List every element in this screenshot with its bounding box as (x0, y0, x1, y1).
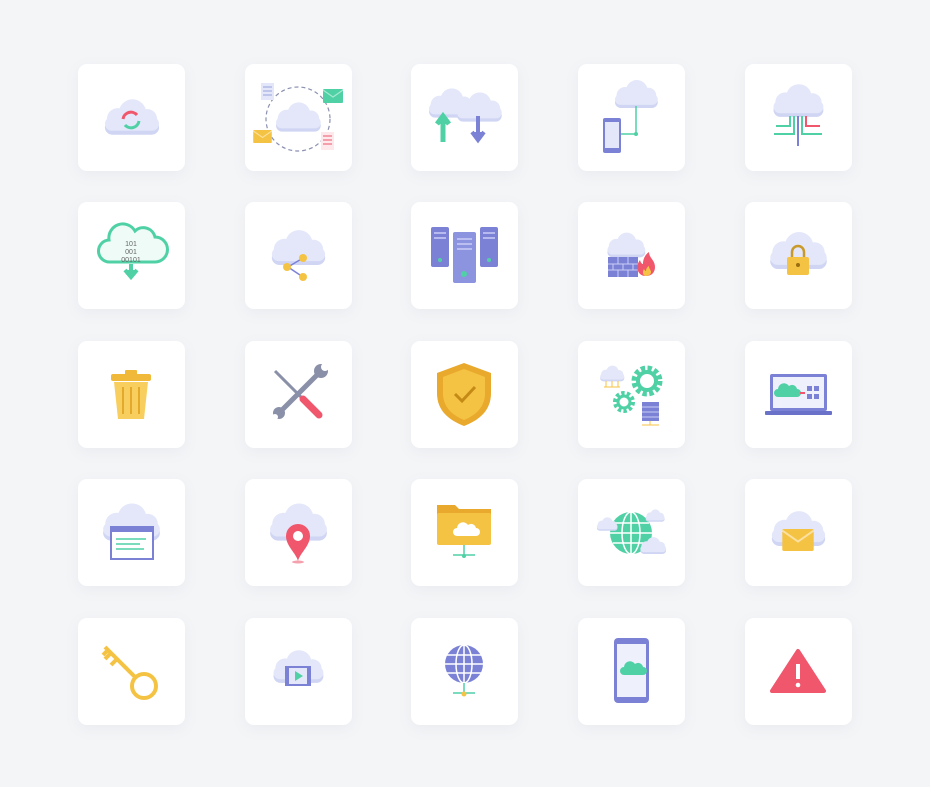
card: servers (411, 202, 518, 309)
card: trash (78, 341, 185, 448)
card: shield check (411, 341, 518, 448)
card: warning (745, 618, 852, 725)
card: cloud browser (78, 479, 185, 586)
card: binary cloud download (78, 202, 185, 309)
card: binary cloud download: 00101 (121, 257, 141, 264)
card: cloud sync (78, 64, 185, 171)
card: laptop cloud (745, 341, 852, 448)
card: cloud email sharing (245, 64, 352, 171)
card: tools (245, 341, 352, 448)
card: phone cloud (578, 618, 685, 725)
card: cloud settings (578, 341, 685, 448)
card: cloud network (745, 64, 852, 171)
card: mobile cloud (578, 64, 685, 171)
card: binary cloud download: 001 (125, 249, 137, 256)
card: cloud firewall (578, 202, 685, 309)
card: cloud video (245, 618, 352, 725)
card: globe clouds (578, 479, 685, 586)
card: globe network (411, 618, 518, 725)
card: binary cloud download: 101 (125, 241, 137, 248)
card: upload download (411, 64, 518, 171)
card: cloud mail (745, 479, 852, 586)
card: cloud share (245, 202, 352, 309)
card: key (78, 618, 185, 725)
card: cloud folder (411, 479, 518, 586)
card: cloud lock (745, 202, 852, 309)
card: cloud location (245, 479, 352, 586)
